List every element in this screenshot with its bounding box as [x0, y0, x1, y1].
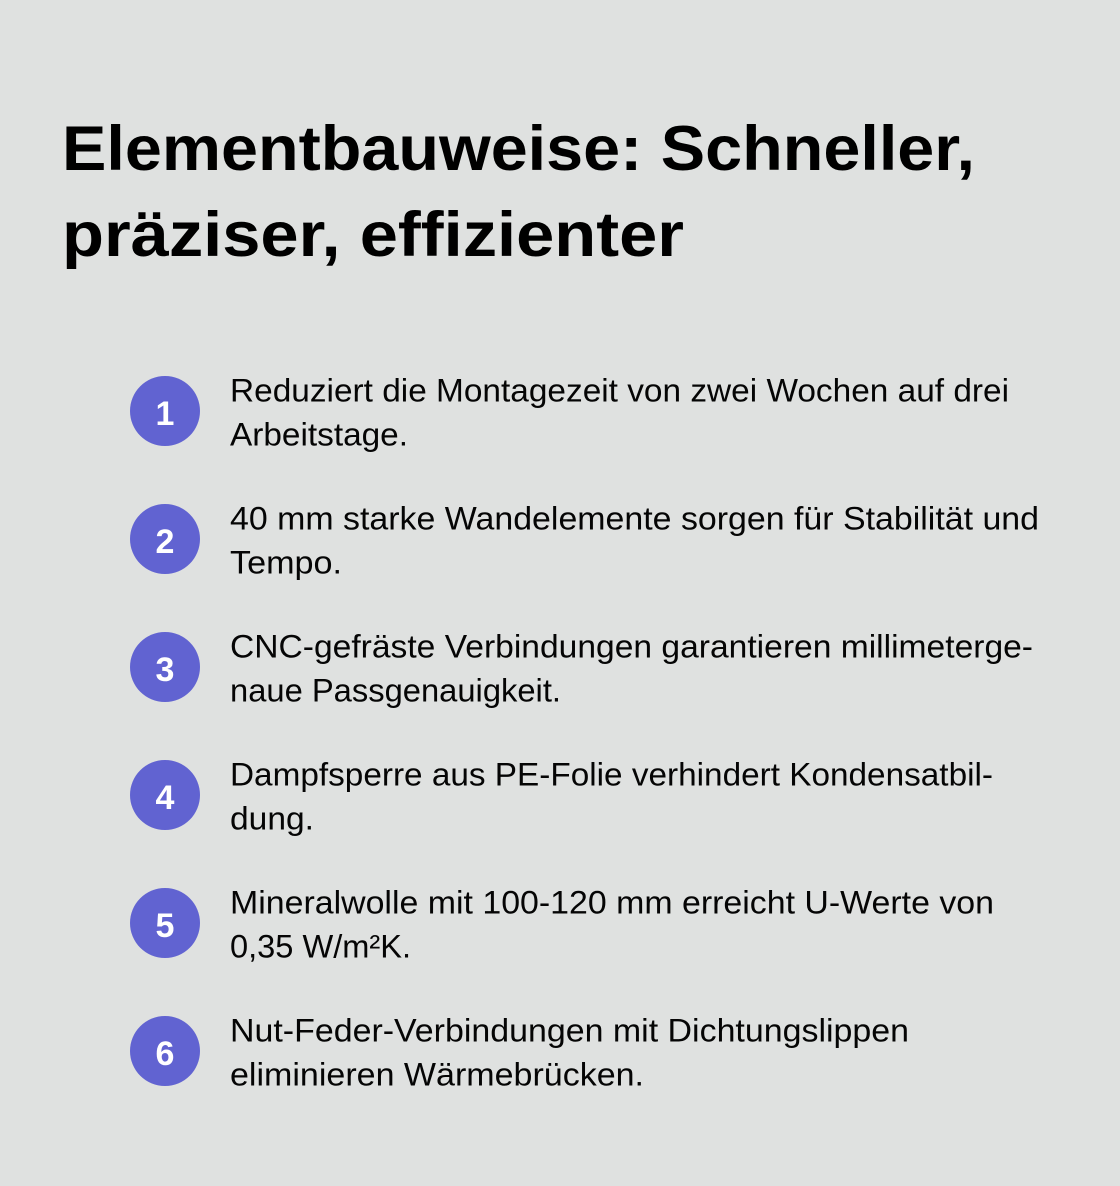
icon: number badge 4: 4 — [156, 779, 175, 817]
title — [62, 114, 975, 270]
icon: number badge 5 — [130, 888, 200, 958]
text: item 5: 0,35 W/m²K. — [230, 928, 411, 964]
text: item 3: naue Passgenauigkeit. — [230, 672, 561, 708]
icon: number badge 6: 6 — [156, 1035, 174, 1073]
text: item 4: Dampfsperre aus PE-Folie verhindert Kondensatbil- — [230, 756, 993, 792]
title: Elementbauweise: Schneller, — [62, 114, 975, 184]
text: item 5 — [230, 884, 994, 964]
text: item 1: Reduziert die Montagezeit von zwei Wochen auf drei — [230, 372, 1009, 408]
text: item 3 — [230, 628, 1033, 708]
text: item 2 — [230, 500, 1039, 580]
icon: number badge 4 — [130, 760, 200, 830]
icon: number badge 6 — [130, 1016, 200, 1086]
text: item 4: dung. — [230, 800, 314, 836]
text: item 2: Tempo. — [230, 544, 342, 580]
text: item 6: Nut-Feder-Verbindungen mit Dichtungslippen — [230, 1012, 909, 1048]
item 1 — [130, 372, 1009, 452]
icon: number badge 5: 5 — [156, 907, 174, 945]
icon: number badge 1: 1 — [156, 395, 174, 433]
text: item 1: Arbeitstage. — [230, 416, 408, 452]
list of six benefits — [130, 372, 1039, 1092]
title: präziser, effizienter — [62, 200, 684, 270]
text: item 5: Mineralwolle mit 100-120 mm erreicht U-Werte von — [230, 884, 994, 920]
item 3 — [130, 628, 1033, 708]
item 6 — [130, 1012, 909, 1092]
item 5 — [130, 884, 994, 964]
item 4 — [130, 756, 993, 836]
text: item 6: eliminieren Wärmebrücken. — [230, 1056, 644, 1092]
text: item 4 — [230, 756, 993, 836]
icon: number badge 3 — [130, 632, 200, 702]
icon: number badge 2: 2 — [156, 523, 174, 561]
item 2 — [130, 500, 1039, 580]
text: item 3: CNC-gefräste Verbindungen garantieren millimeterge- — [230, 628, 1033, 664]
icon: number badge 1 — [130, 376, 200, 446]
text: item 2: 40 mm starke Wandelemente sorgen für Stabilität und — [230, 500, 1039, 536]
icon: number badge 2 — [130, 504, 200, 574]
icon: number badge 3: 3 — [156, 651, 174, 689]
text: item 1 — [230, 372, 1009, 452]
text: item 6 — [230, 1012, 909, 1092]
